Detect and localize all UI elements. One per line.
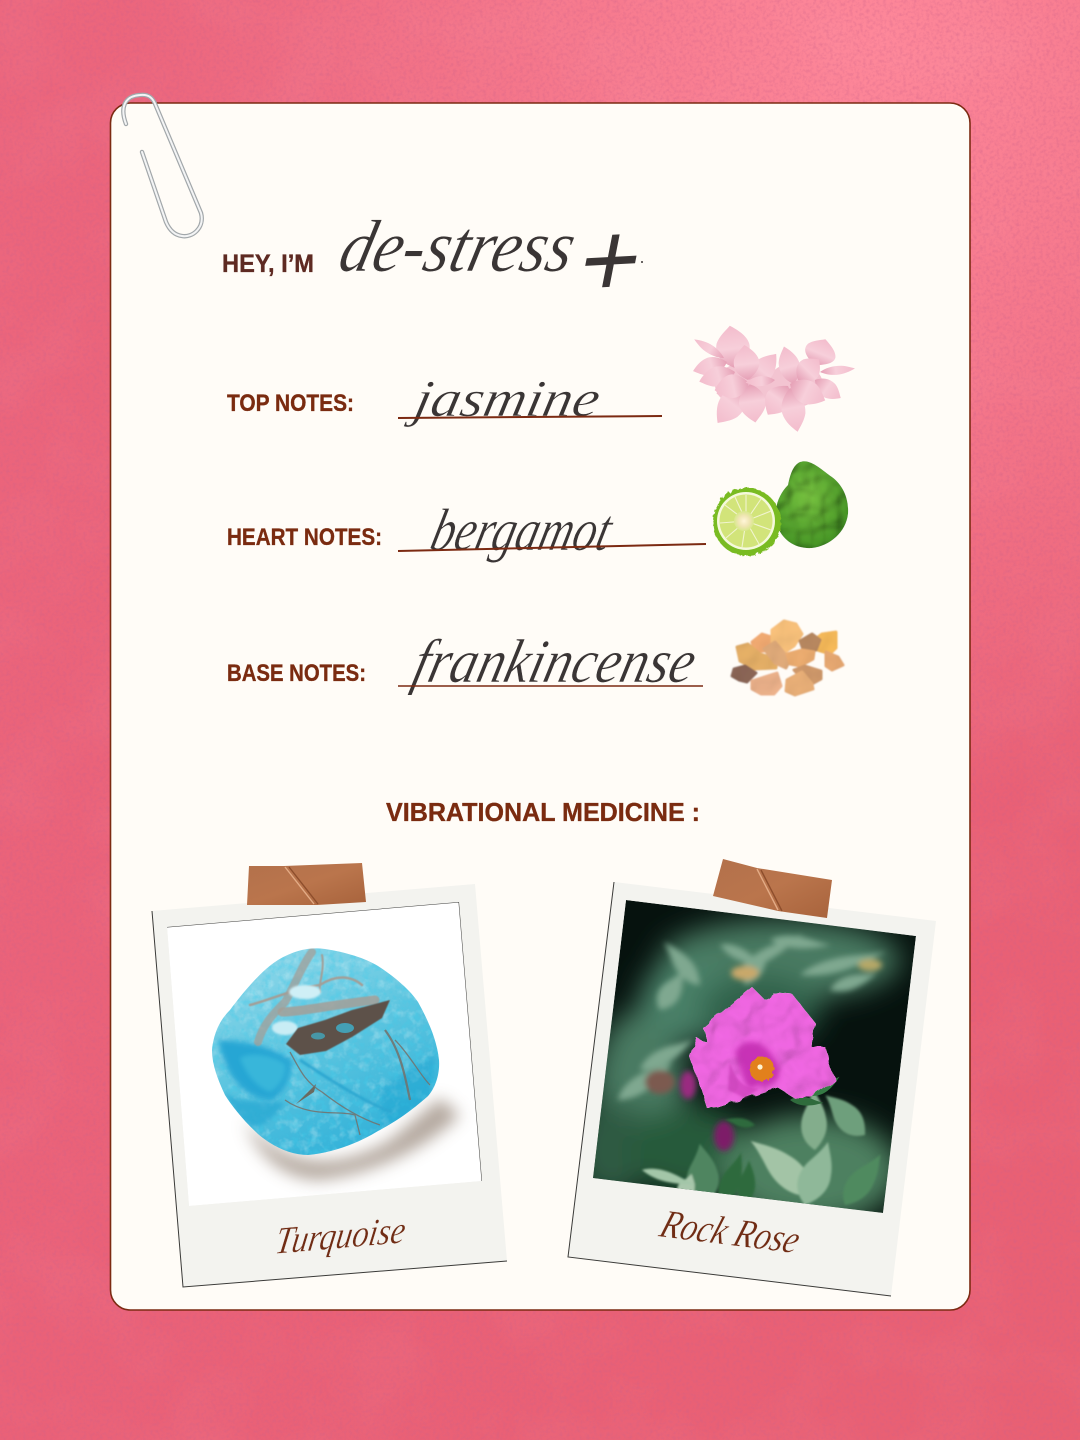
heading label: HEY, I’M bbox=[222, 250, 314, 278]
underline bbox=[398, 416, 662, 418]
row: base notes bbox=[227, 621, 843, 696]
handwritten caption: turquoise: Turquoise bbox=[273, 1209, 409, 1263]
handwritten period bbox=[641, 261, 643, 263]
panel: cream paper card bbox=[110, 103, 970, 1310]
heading: vibrational medicine: VIBRATIONAL MEDICINE : bbox=[386, 797, 700, 827]
handwritten value: jasmine: jasmine bbox=[403, 371, 606, 428]
label: top notes: TOP NOTES: bbox=[227, 390, 354, 417]
icon: frankincense resin bbox=[732, 621, 843, 695]
icon: jasmine flowers bbox=[691, 324, 855, 434]
underline bbox=[398, 544, 706, 551]
label: base notes: BASE NOTES: bbox=[227, 660, 366, 687]
row: heart notes bbox=[227, 461, 848, 564]
row: top notes bbox=[227, 324, 855, 434]
underline bbox=[398, 685, 703, 687]
handwritten name: de-stress bbox=[332, 206, 584, 288]
heading: hey, i'm de-stress bbox=[222, 198, 653, 321]
label: heart notes: HEART NOTES: bbox=[227, 524, 382, 551]
handwritten caption: rock rose: Rock Rose bbox=[654, 1202, 807, 1262]
polaroid: turquoise bbox=[152, 863, 507, 1287]
icon: paperclip bbox=[123, 95, 202, 236]
tape bbox=[713, 859, 832, 918]
polaroid frame bbox=[152, 884, 507, 1287]
cut fruit bbox=[712, 487, 780, 555]
icon: bergamot fruit bbox=[712, 461, 848, 555]
handwritten plus mark: + bbox=[570, 198, 653, 321]
whole fruit bbox=[776, 461, 848, 548]
polaroid frame bbox=[568, 882, 936, 1296]
polaroid: rock rose bbox=[568, 859, 936, 1296]
tape bbox=[247, 863, 366, 905]
photo: rock rose flower bbox=[572, 900, 916, 1225]
handwritten value: bergamot: bergamot bbox=[425, 498, 621, 564]
photo: turquoise stone bbox=[167, 902, 482, 1206]
handwritten value: frankincense: frankincense bbox=[407, 627, 704, 696]
